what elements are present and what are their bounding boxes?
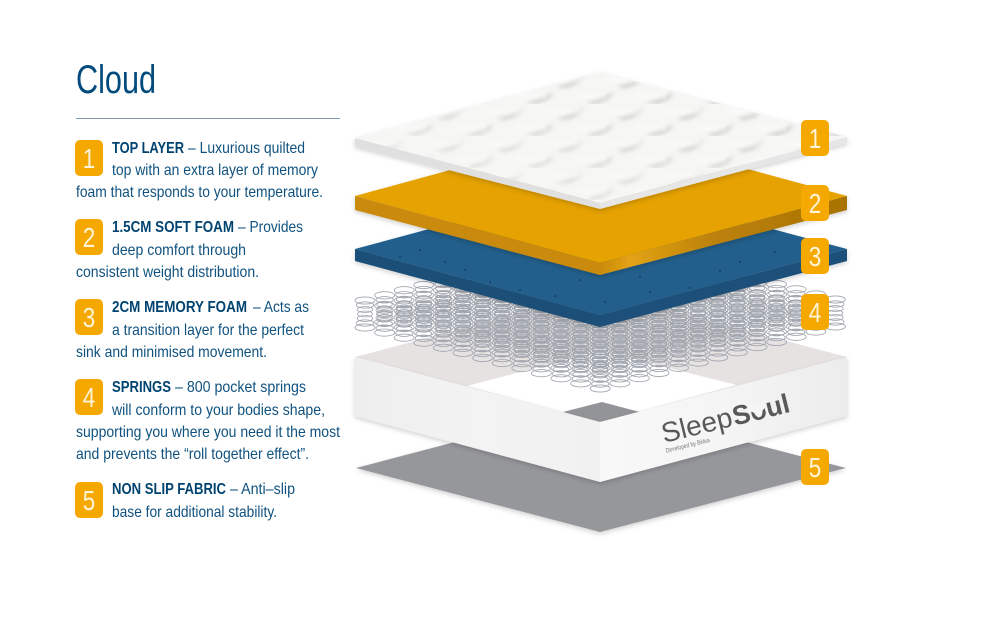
badge 3 [75, 299, 103, 335]
layer 1: quilted top [355, 72, 847, 209]
callout badge 4 [801, 294, 829, 330]
text block: soft foam: consistent weight distribution. [76, 264, 259, 281]
text block: memory foam: 2CM MEMORY FOAM [112, 299, 247, 316]
layer 4: pocket springs [355, 235, 845, 392]
callout badge 5 [801, 449, 829, 485]
callout badge 2 [801, 185, 829, 221]
text block: top layer: TOP LAYER [112, 140, 184, 157]
SleepSoul logo: Developed by Birlea [665, 437, 711, 455]
text block: springs [75, 379, 340, 463]
box opening [467, 351, 737, 422]
text block: non slip fabric [75, 481, 295, 521]
callout badge 5: 5 [809, 452, 821, 483]
badge 1 [75, 140, 103, 176]
text block: top layer [75, 140, 323, 201]
layer 3: memory foam [355, 183, 847, 327]
callout badge 3: 3 [809, 241, 821, 272]
text block: springs: – 800 pocket springs [175, 379, 306, 396]
callout badge 3 [801, 238, 829, 274]
badge 5 [75, 482, 103, 518]
text block: springs: supporting you where you need it the most [76, 424, 340, 441]
badge 4: 4 [83, 382, 95, 413]
callout badge 2: 2 [809, 188, 821, 219]
text block: non slip fabric: base for additional stability. [112, 504, 277, 521]
title: Cloud [76, 58, 156, 102]
text block: memory foam: sink and minimised movement. [76, 344, 267, 361]
text block: top layer: – Luxurious quilted [188, 140, 305, 157]
badge 5: 5 [83, 485, 95, 516]
text block: top layer: top with an extra layer of memory [112, 162, 318, 179]
text block: springs: and prevents the “roll together effect”. [76, 446, 309, 463]
text block: soft foam: – Provides [238, 219, 303, 236]
text block: memory foam [75, 299, 309, 361]
heading rule [76, 118, 340, 119]
text block: non slip fabric: NON SLIP FABRIC [112, 481, 226, 498]
callout badge 4: 4 [809, 297, 821, 328]
badge 4 [75, 379, 103, 415]
layer 2: soft foam [355, 129, 847, 275]
box walls [355, 357, 847, 482]
callout badge 1 [801, 120, 829, 156]
badge 2 [75, 219, 103, 255]
badge 1: 1 [83, 143, 95, 174]
box top frame [355, 292, 847, 422]
text block: top layer: foam that responds to your temperature. [76, 184, 323, 201]
text block: springs: SPRINGS [112, 379, 171, 396]
text block: soft foam: deep comfort through [112, 242, 246, 259]
text block: memory foam: – Acts as [253, 299, 309, 316]
text block: soft foam [75, 219, 303, 281]
badge 3: 3 [83, 302, 95, 333]
text block: soft foam: 1.5CM SOFT FOAM [112, 219, 234, 236]
text block: non slip fabric: – Anti–slip [230, 481, 295, 498]
badge 2: 2 [83, 222, 95, 253]
layer: mattress box with logo [355, 292, 847, 482]
SleepSoul logo: Sleep [658, 402, 735, 449]
layer 5: non slip fabric [356, 404, 846, 532]
base visible through opening [563, 402, 640, 422]
text block: memory foam: a transition layer for the perfect [112, 322, 304, 339]
SleepSoul logo: Soul [729, 388, 793, 431]
text block: springs: will conform to your bodies shape, [111, 402, 325, 419]
SleepSoul logo [658, 387, 794, 455]
callout badge 1: 1 [809, 123, 821, 154]
